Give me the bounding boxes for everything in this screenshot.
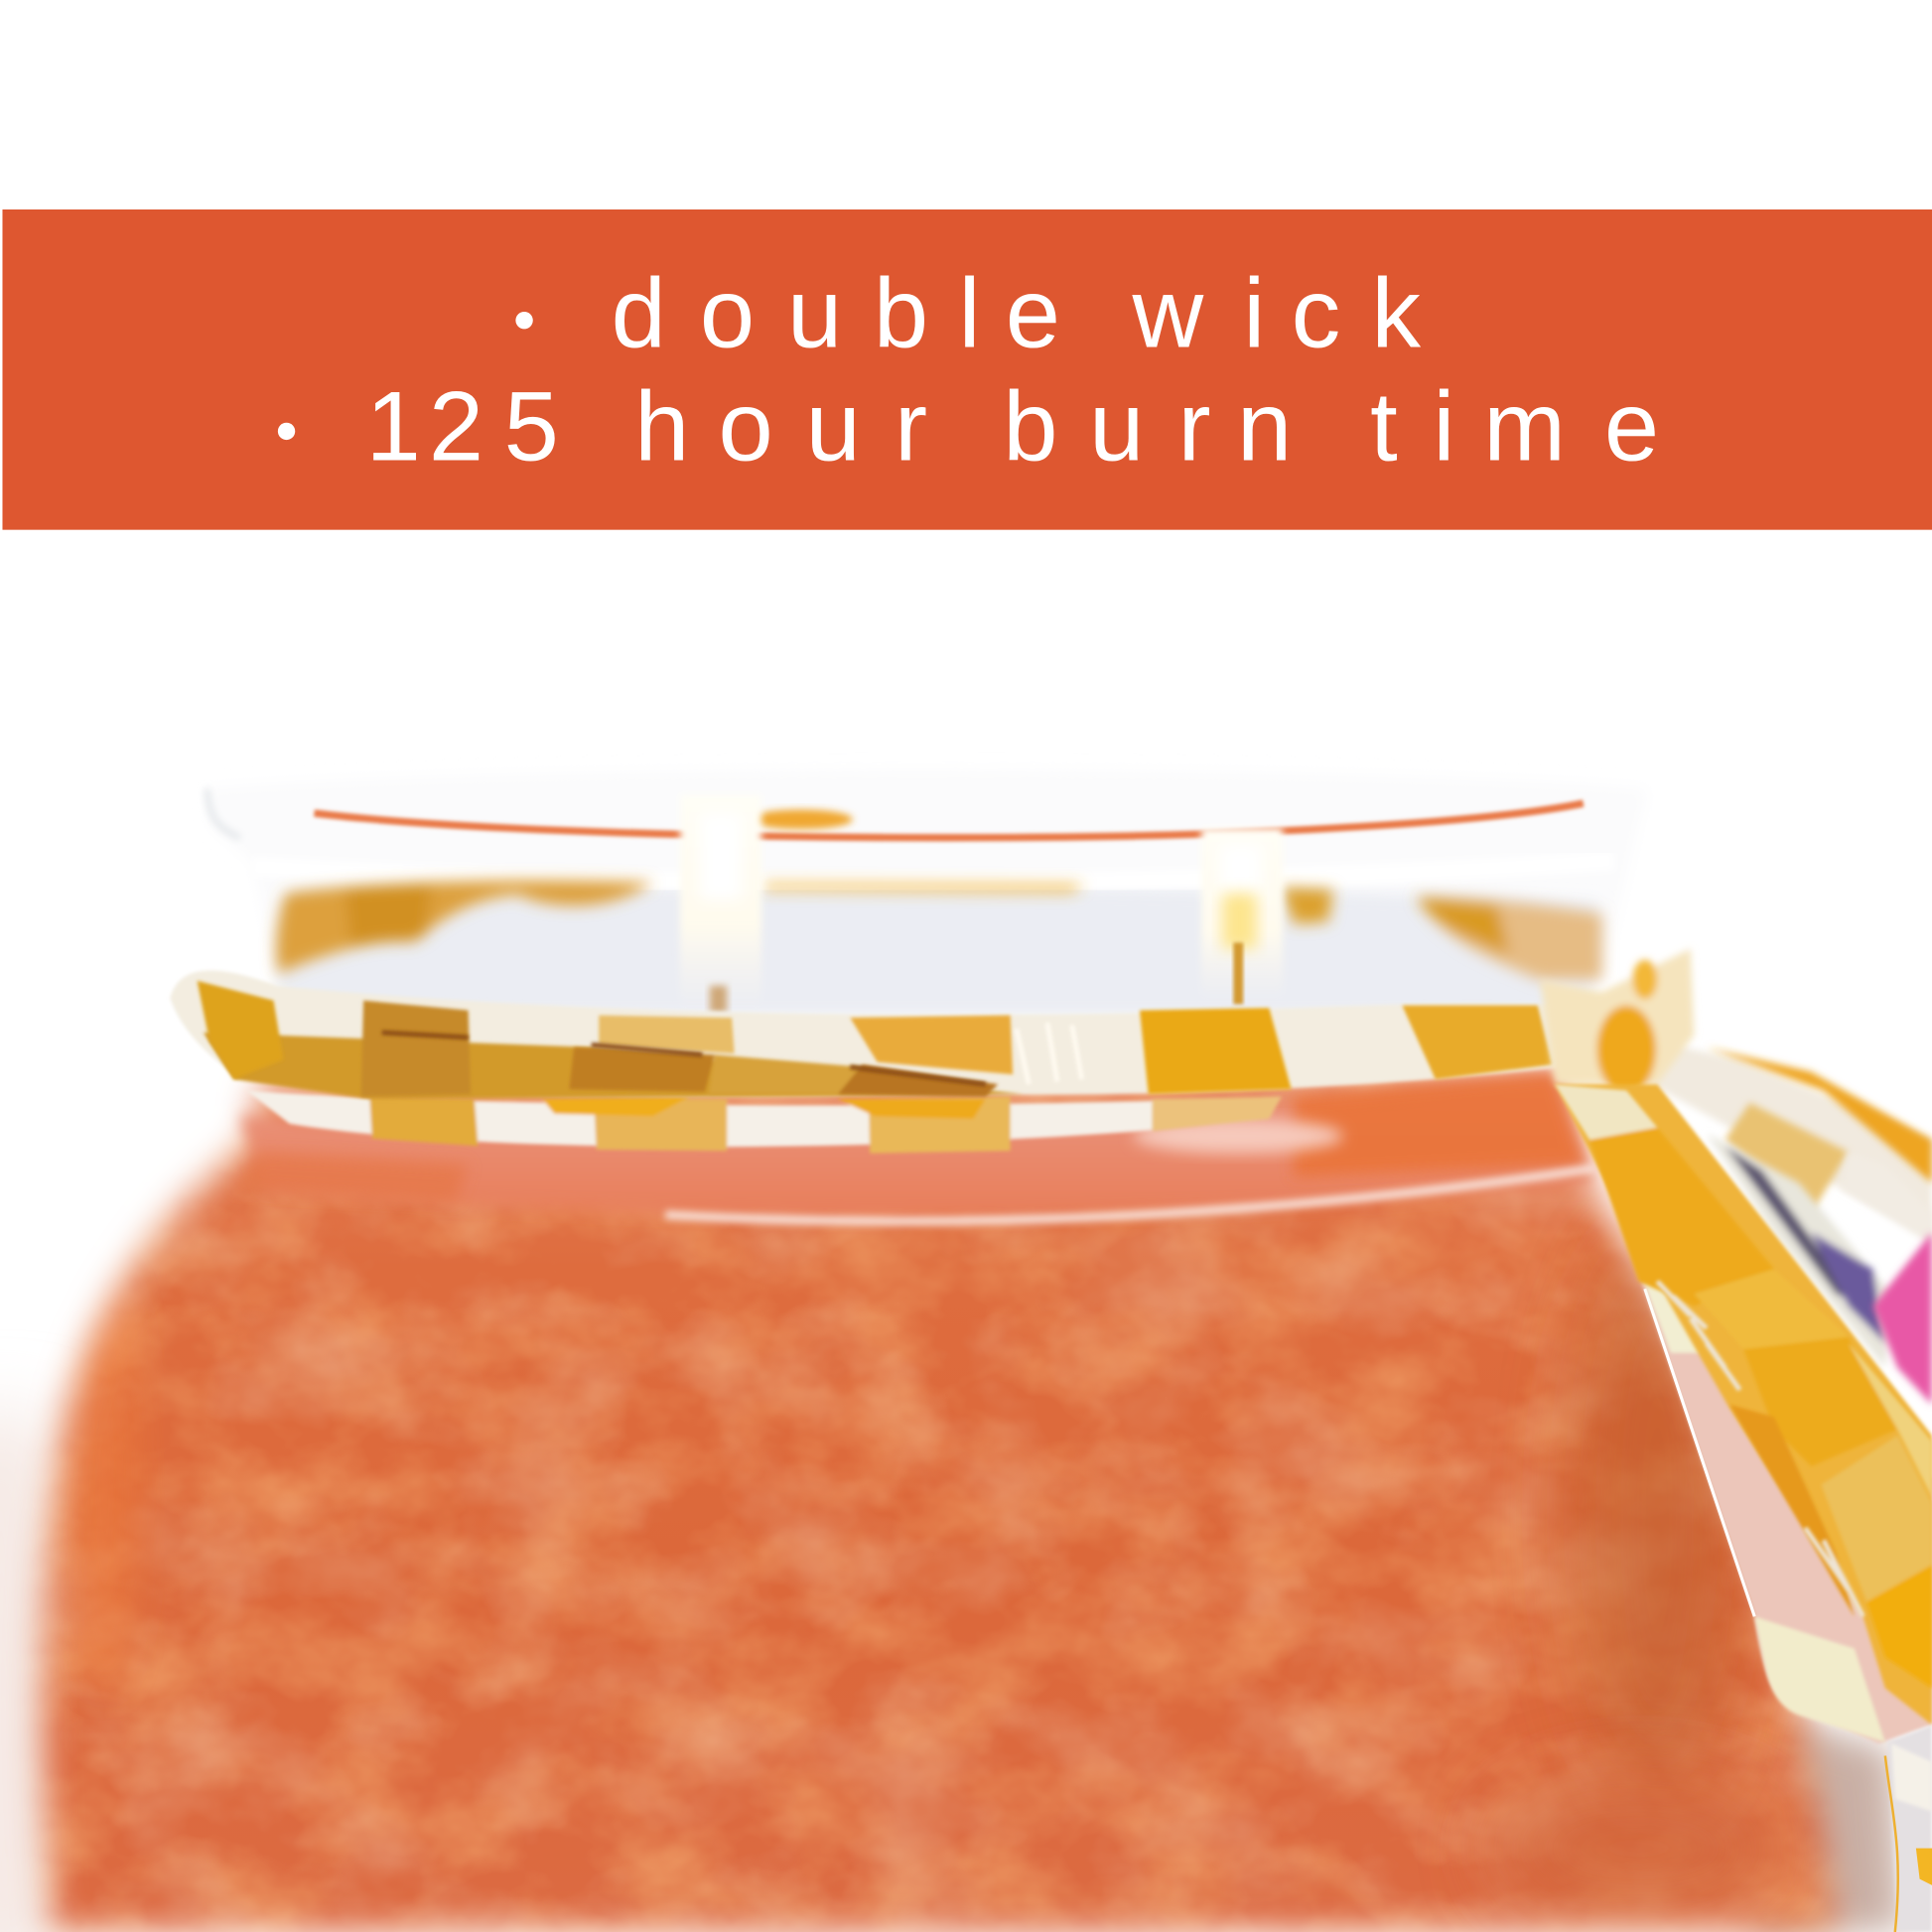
glass jar top with wax surface [207,770,1649,1017]
hang tag [1641,1269,1932,1743]
ribbon upper band [170,971,1559,1099]
ribbon upper checks [198,981,1553,1097]
wax body [0,1047,1932,1932]
banner text: 125 hour burn time: 125 hour burn time [366,372,1659,483]
jar neck [240,1072,1591,1216]
tie fringe [1657,1282,1863,1616]
ribbon dark creases [382,1033,986,1084]
glass highlights [665,1119,1595,1221]
ribbon dark fold band [204,1033,1023,1099]
left flame glow [673,794,766,1013]
tag white edge [1645,1289,1754,1616]
tag cream band [1754,1616,1885,1742]
lower hanging thread and fabric [1885,1725,1932,1932]
tie checks [1555,1084,1932,1688]
photo: candle jar [0,770,1932,1932]
orange banner [2,209,1932,530]
ribbon back tie [1651,1041,1932,1244]
right flame glow [1201,828,1283,1004]
left ribbon reflection [276,881,1084,973]
front ribbon tie [1555,1084,1932,1725]
ribbon fringe [1017,1023,1082,1084]
right ribbon reflection [1282,888,1601,980]
ribbon lower strip [246,1090,1282,1154]
knot tufts [1540,949,1694,1094]
jar shadow [1749,1713,1903,1932]
ribbon white base [170,971,1559,1096]
orange rim reflection [314,803,1584,838]
left pale edge of jar [0,1417,62,1932]
banner text: double wick: double wick [612,258,1421,368]
amber blob at rim [750,809,853,829]
pink fabric [1872,1232,1932,1405]
banner background [2,209,1932,530]
neck orange tint [1294,1072,1584,1176]
lower ribbon checks [369,1097,1282,1154]
purple speckled fabric [1707,1134,1891,1368]
